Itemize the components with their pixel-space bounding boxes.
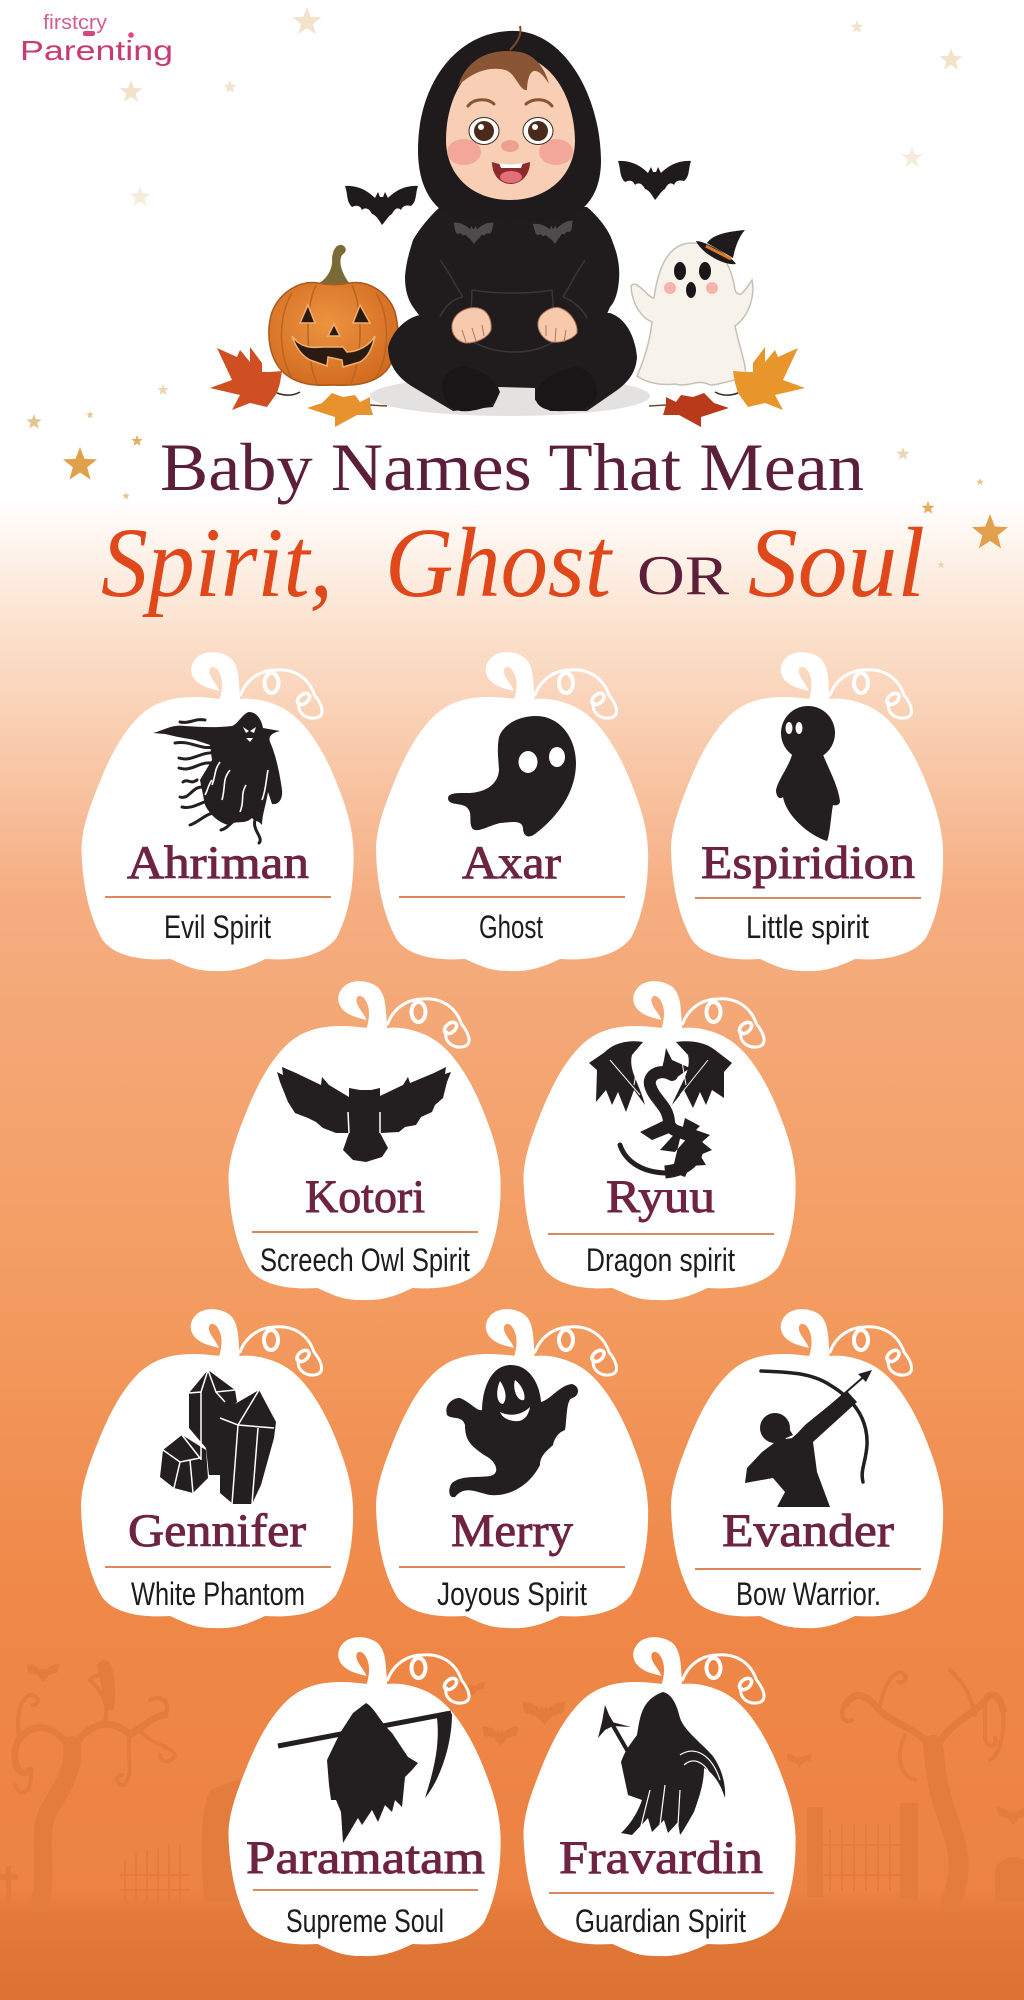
name: Axar	[462, 837, 561, 889]
card: Ahriman	[82, 652, 354, 971]
icon: smiling ghost	[446, 1365, 578, 1497]
icon: wraith	[153, 712, 282, 843]
card: Paramatam	[228, 1637, 501, 1956]
meaning: Evil Spirit	[164, 909, 271, 945]
graveyard silhouette background	[0, 1660, 1024, 1903]
name: Ahriman	[127, 837, 309, 889]
logo: Parenting	[20, 35, 173, 66]
title: OR	[637, 545, 730, 607]
card: Axar	[376, 652, 648, 971]
meaning: Guardian Spirit	[575, 1903, 746, 1939]
meaning: Ghost	[479, 909, 543, 945]
card: Gennifer	[81, 1309, 353, 1628]
baby hands	[452, 308, 577, 343]
icon: owl	[277, 1067, 451, 1162]
card: Kotori	[228, 981, 501, 1300]
name: Kotori	[305, 1171, 425, 1223]
card: Ryuu	[524, 981, 796, 1300]
icon: dragon	[589, 1041, 732, 1177]
title: Baby Names That Mean	[160, 429, 864, 505]
logo: firstcry	[43, 12, 107, 34]
name: Espiridion	[701, 837, 915, 889]
meaning: Joyous Spirit	[437, 1576, 587, 1612]
hero illustration: baby with pumpkin and ghost	[210, 26, 805, 427]
title: Ghost	[385, 507, 613, 618]
icon: little spirit	[776, 706, 840, 841]
icon: reaper with scythe	[278, 1703, 452, 1843]
icon: crystals	[160, 1370, 276, 1504]
meaning: Dragon spirit	[586, 1242, 735, 1278]
icon: right bat	[618, 161, 691, 200]
icon: hooded guardian	[598, 1692, 725, 1835]
jack-o-lantern	[269, 245, 398, 385]
decorative stars	[26, 7, 1008, 568]
name: Gennifer	[128, 1505, 306, 1557]
icon: archer	[745, 1370, 872, 1507]
icon: ghost	[448, 716, 576, 836]
meaning: Bow Warrior.	[736, 1576, 881, 1612]
card: Espiridion	[671, 652, 943, 971]
title	[101, 429, 925, 618]
name: Evander	[722, 1505, 894, 1557]
name: Fravardin	[559, 1832, 763, 1884]
card: Merry	[376, 1309, 648, 1628]
logo	[20, 12, 173, 66]
name: Ryuu	[606, 1171, 715, 1223]
name: Paramatam	[246, 1832, 485, 1884]
meaning: White Phantom	[131, 1576, 305, 1612]
title: Soul	[748, 507, 925, 618]
meaning: Supreme Soul	[286, 1903, 444, 1939]
autumn leaves	[210, 347, 805, 427]
card: Fravardin	[524, 1637, 796, 1956]
name: Merry	[451, 1505, 574, 1557]
title: Spirit,	[101, 507, 333, 618]
meaning: Little spirit	[746, 909, 869, 945]
baby body	[388, 207, 637, 411]
card: Evander	[671, 1309, 943, 1628]
friendly ghost with witch hat	[631, 230, 753, 385]
baby hood	[418, 31, 601, 222]
meaning: Screech Owl Spirit	[260, 1242, 470, 1278]
icon: left bat	[345, 186, 418, 225]
baby face	[446, 26, 575, 200]
